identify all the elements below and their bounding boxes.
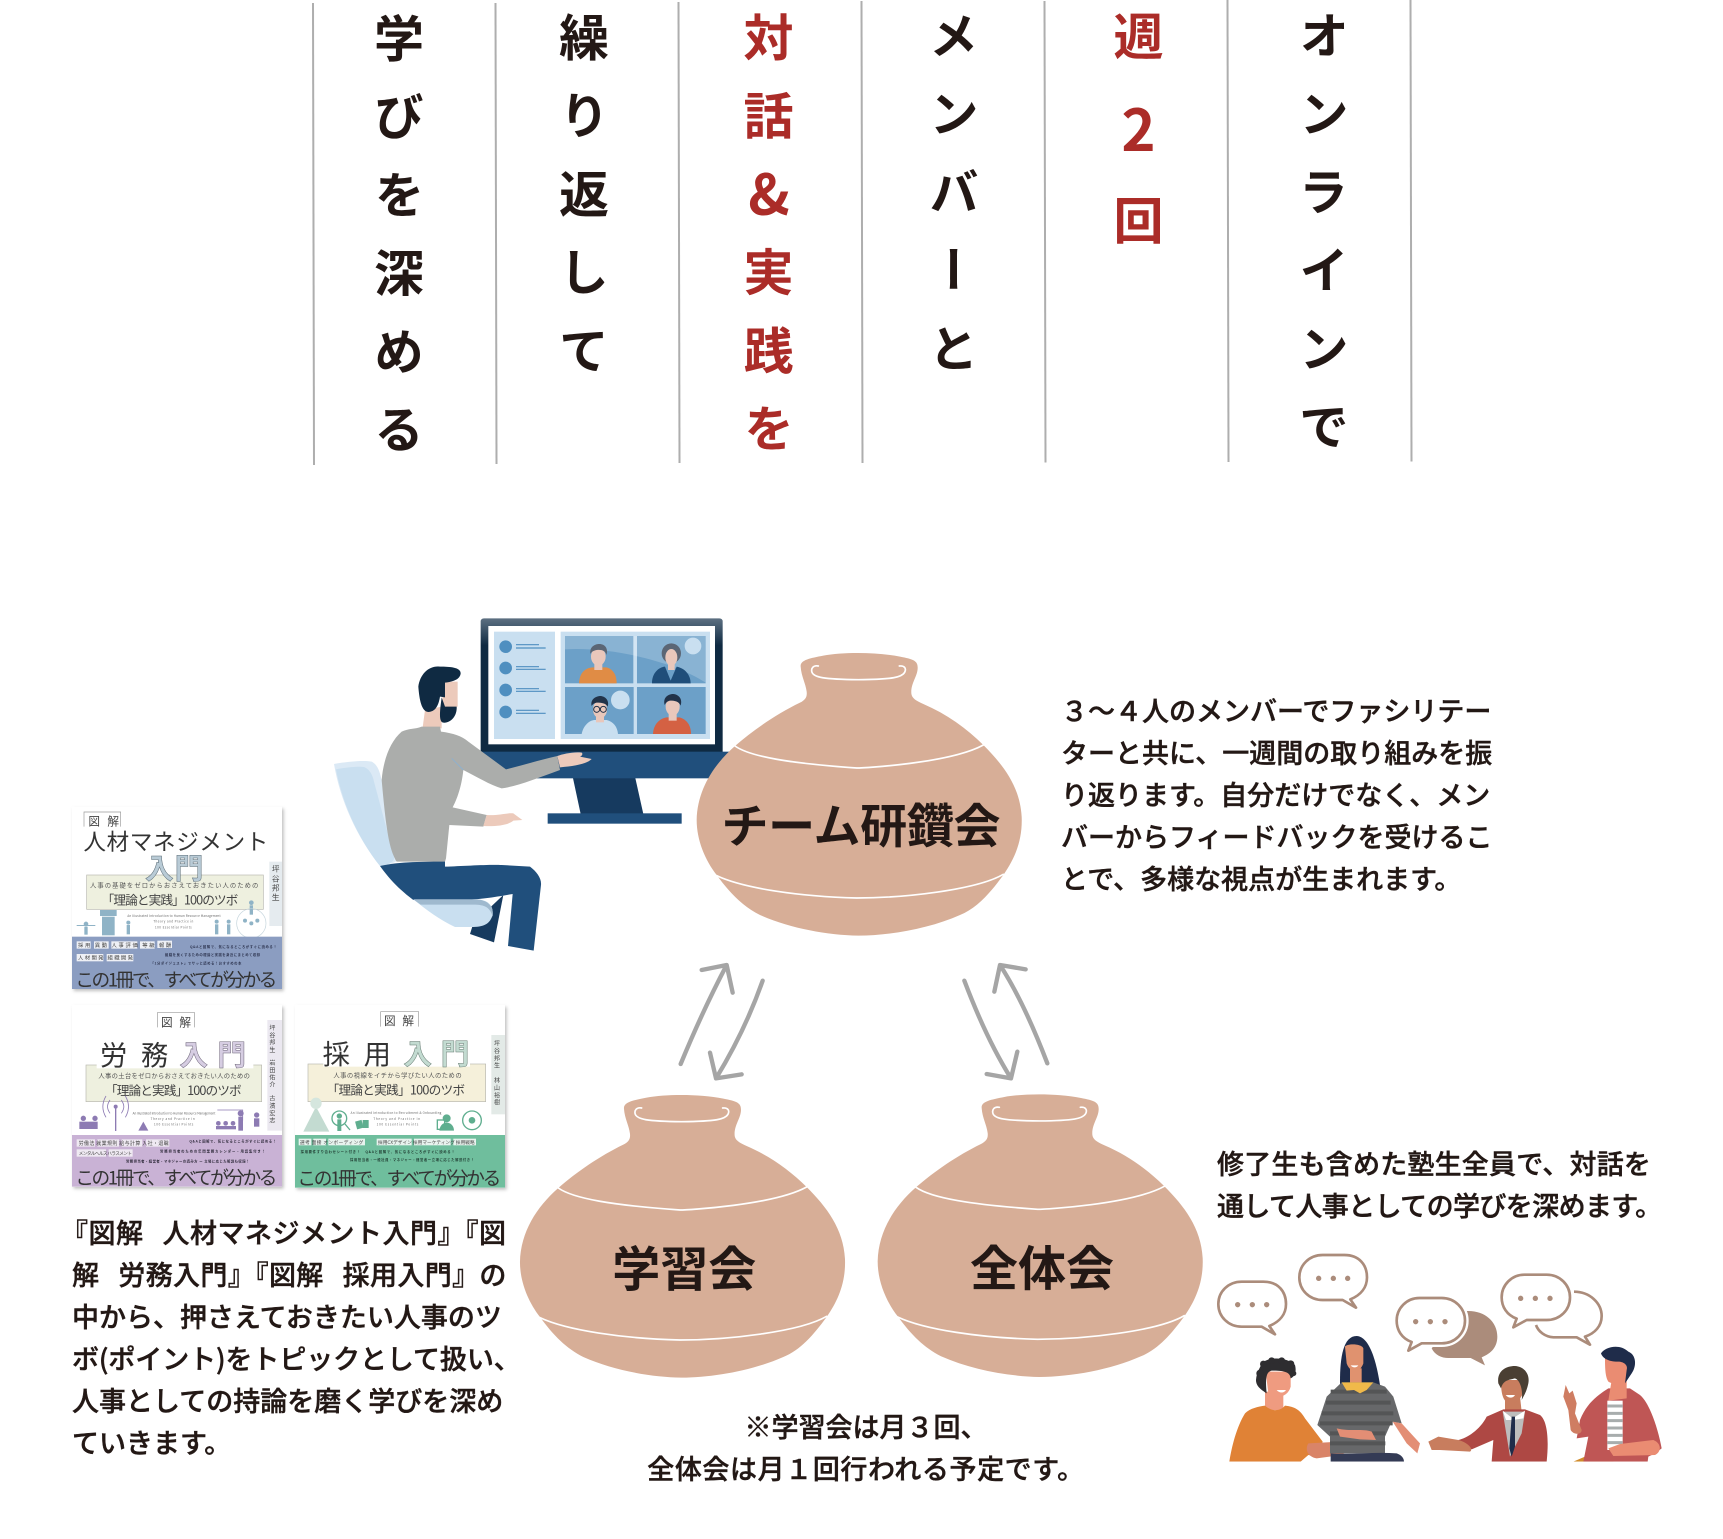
book: 図解 労務入門: 「理論と実践」100のツボ	[105, 1080, 242, 1099]
book: 図解 採用入門: 邦	[494, 1053, 500, 1062]
text block: チーム研鑽会 description: ３〜４人のメンバーでファシリテー	[1061, 690, 1491, 729]
cover pictograms	[79, 1105, 259, 1131]
book: 図解 労務入門: Theory and Practice in	[151, 1117, 195, 1121]
vertical divider lines	[313, 0, 1412, 465]
book: 図解 労務入門: 邦	[269, 1038, 275, 1047]
book: 図解 採用入門: 林	[494, 1076, 500, 1085]
speech bubble 1	[1218, 1282, 1286, 1334]
book: 図解 人材マネジメント入門: 「1分ダイジェスト」でサッと読める！おすすめの本	[151, 960, 242, 965]
arrow: left down	[710, 981, 763, 1078]
book: 図解 労務入門: Q&Aと図解で、気になるところがすぐに読める！	[189, 1139, 276, 1144]
text block: 全体会 description: 通して人事としての学びを深めます。	[1217, 1185, 1661, 1224]
book: 図解 人材マネジメント入門: 「理論と実践」100のツボ	[102, 889, 239, 908]
book: 図解 人材マネジメント入門: この1冊で、すべてが分かる	[75, 966, 277, 993]
book: 図解 人材マネジメント入門: 人事の基礎をゼロからおさえておきたい人のための	[90, 880, 258, 889]
arrow: right up	[994, 965, 1047, 1063]
person: man in suit	[1428, 1366, 1548, 1462]
book: 図解 労務入門: 労務	[100, 1033, 168, 1073]
vase: 学習会	[520, 1095, 845, 1378]
person: woman in striped sweater	[1317, 1336, 1420, 1462]
screen participant 3	[582, 691, 630, 734]
speech bubble 4 with outline bubble	[1502, 1275, 1602, 1345]
vase: チーム研鑽会	[697, 653, 1022, 936]
book: 図解 人材マネジメント入門: Q&Aと図解で、気になるところがすぐに読める！	[190, 944, 277, 949]
book: 図解 採用入門: 採用	[323, 1032, 391, 1072]
book: 図解 労務入門: 濱	[269, 1101, 275, 1110]
screen participant 1	[579, 644, 617, 683]
book: 図解 採用入門: Theory and Practice in	[373, 1117, 420, 1121]
book: 図解 採用入門: 採用要件すり合わせシート付き！	[301, 1149, 360, 1154]
text block: 学習会 description: 『図解 人材マネジメント入門』『図	[61, 1212, 506, 1251]
book: 図解 労務入門: 坪	[269, 1023, 275, 1032]
book: 図解 採用入門: 人事の視線をイチから学びたい人のための	[333, 1070, 462, 1079]
book: 図解 人材マネジメント入門: 100 Essential Points	[155, 925, 192, 929]
note: meeting frequency	[647, 1406, 1085, 1487]
person: orange sweater	[1229, 1357, 1352, 1462]
arrows between vases	[681, 965, 1047, 1078]
vase: 全体会: 全体会	[970, 1229, 1114, 1299]
text block: チーム研鑽会 description: ターと共に、一週間の取り組みを振	[1061, 732, 1492, 771]
book: 図解 採用入門: 100 Essential Points	[377, 1123, 419, 1127]
book: 図解 人材マネジメント入門: Theory and Practice in	[153, 920, 194, 924]
speech bubble 3 with filled bubble	[1397, 1298, 1497, 1365]
heading column: 週2回: 週 2 回	[1096, 10, 1180, 284]
text block: 全体会 description	[1217, 1143, 1661, 1224]
cover pictograms	[77, 900, 259, 935]
book: 図解 労務入門: 志	[269, 1116, 275, 1125]
text block: 学習会 description: ていきます。	[72, 1422, 231, 1461]
book: 図解 採用入門: 図解	[384, 1012, 414, 1029]
arrow: left up	[681, 965, 733, 1064]
book: 図解 採用入門: 生	[494, 1061, 500, 1070]
book: 図解 人材マネジメント入門: An Illustrated Introduction to Human Resource Management	[127, 914, 222, 918]
book: 図解 採用入門: 入門	[403, 1032, 469, 1073]
book: 図解 労務入門: 岩	[269, 1058, 275, 1067]
book: 図解 採用入門	[295, 1005, 505, 1191]
screen participant 2	[652, 638, 701, 683]
heading column: 繰り返して: 繰り返して	[548, 12, 620, 403]
illustration: man at monitor in video call	[334, 618, 734, 951]
book: 図解 採用入門: Q&Aと図解で、気になるところがすぐに読める！	[365, 1149, 455, 1154]
book: 図解 労務入門: 入門	[179, 1033, 246, 1074]
book: 図解 労務入門: 佑	[269, 1073, 275, 1082]
book: 図解 人材マネジメント入門: 坪	[272, 864, 280, 875]
book: 図解 労務入門: メンタルヘルス ハラスメント	[79, 1150, 132, 1157]
text block: 学習会 description	[61, 1212, 521, 1461]
book: 図解 人材マネジメント入門: 人材開発 組織開発	[78, 954, 134, 962]
book: 図解 労務入門: 労務担当者のための年間業務カレンダー・用語集付き！	[160, 1149, 265, 1154]
vase: 学習会: 学習会	[612, 1230, 756, 1300]
book: 図解 採用入門: 山	[494, 1083, 500, 1092]
text block: 学習会 description: ボ(ポイント)をトピックとして扱い、	[72, 1338, 521, 1377]
text block: チーム研鑽会 description	[1061, 690, 1492, 897]
book: 図解 人材マネジメント入門: 邦	[272, 883, 280, 894]
heading column: 対話&実践を: 対 話 & 実践を	[728, 12, 810, 481]
book: 図解 労務入門: 人事の土台をゼロからおさえておきたい人のための	[98, 1071, 250, 1080]
book: 図解 採用入門: 採用CXデザイン 採用マーケティング 採用戦略	[378, 1139, 475, 1146]
book: 図解 労務入門: 労働法 就業規則 給与計算 入社・退職	[79, 1140, 169, 1147]
book: 図解 採用入門: 裕	[494, 1090, 500, 1099]
note: meeting frequency: 全体会は月１回行われる予定です。	[647, 1448, 1085, 1487]
text block: チーム研鑽会 description: り返ります。自分だけでなく、メン	[1061, 774, 1490, 813]
book: 図解 人材マネジメント入門: 組織を良くするための理論と実践を身近にまとめて収録	[165, 952, 261, 957]
office chair	[334, 761, 400, 866]
vase: チーム研鑽会: チーム研鑽会	[722, 788, 1000, 857]
book: 図解 労務入門: 図解	[161, 1013, 191, 1030]
person: man in red open shirt	[1563, 1347, 1662, 1462]
book: 図解 労務入門: 生	[269, 1045, 275, 1054]
heading column: 学びを深める: 学びを深める	[363, 13, 435, 482]
monitor	[481, 618, 734, 824]
book: 図解 採用入門: 坪	[494, 1039, 500, 1048]
text block: 学習会 description: 人事としての持論を磨く学びを深め	[72, 1380, 503, 1419]
book: 図解 採用入門: 選考 面接 オンボーディング	[300, 1139, 364, 1146]
book: 図解 労務入門: 田	[269, 1065, 275, 1074]
book: 図解 人材マネジメント入門: 人材マネジメント	[83, 824, 268, 857]
text block: 学習会 description: 解 労務入門』『図解 採用入門』の	[72, 1254, 507, 1293]
text block: チーム研鑽会 description: バーからフィードバックを受けるこ	[1061, 816, 1492, 855]
cover pictograms	[303, 1107, 329, 1132]
arrow: right down	[964, 981, 1017, 1078]
speech bubble 2	[1299, 1255, 1367, 1308]
book: 図解 人材マネジメント入門: 入門	[145, 846, 203, 887]
book: 図解 労務入門: この1冊で、すべてが分かる	[75, 1163, 277, 1190]
book: 図解 労務入門: 谷	[269, 1030, 275, 1039]
book: 図解 採用入門: この1冊で、すべてが分かる	[297, 1164, 501, 1191]
heading column: オンラインで: オンラインで	[1288, 10, 1360, 479]
book: 図解 人材マネジメント入門: 採用 異動 人事評価 等級 報酬	[78, 941, 171, 949]
book: 図解 人材マネジメント入門: 生	[272, 892, 280, 903]
man figure	[380, 666, 592, 951]
book: 図解 採用入門: 採用担当者・一般社員・マネジャー・経営者ー立場に応じた解説付き！	[350, 1157, 474, 1162]
note: meeting frequency: ※学習会は月３回、	[744, 1406, 988, 1445]
book: 図解 労務入門: 労務担当者・経営者・マネジャーの読み方 ー 立場に応じた解説も収録！	[126, 1158, 249, 1163]
heading column: メンバーと: メンバーと	[918, 10, 990, 401]
text block: 学習会 description: 中から、押さえておきたい人事のツ	[72, 1296, 502, 1335]
book: 図解 採用入門: 樹	[494, 1098, 500, 1107]
screen participant 4	[653, 694, 691, 734]
book: 図解 採用入門: An Illustrated Introduction to Recruitment & Onboarding	[351, 1111, 442, 1115]
text block: 全体会 description: 修了生も含めた塾生全員で、対話を	[1217, 1143, 1651, 1182]
book: 図解 採用入門: 谷	[494, 1046, 500, 1055]
book: 図解 採用入門: 「理論と実践」100のツボ	[327, 1079, 465, 1098]
book: 図解 労務入門: 介	[269, 1080, 275, 1089]
book: 図解 人材マネジメント入門	[72, 807, 282, 993]
book: 図解 労務入門	[72, 1005, 282, 1190]
book: 図解 労務入門: 古	[269, 1094, 275, 1103]
book: 図解 労務入門: An Illustrated Introduction to Human Resource Management	[133, 1111, 216, 1115]
book: 図解 人材マネジメント入門: 谷	[272, 873, 280, 884]
vase: 全体会	[878, 1094, 1203, 1377]
illustration: discussion group with speech bubbles	[1218, 1255, 1662, 1462]
book: 図解 人材マネジメント入門: 図解	[88, 812, 119, 829]
text block: チーム研鑽会 description: とで、多様な視点が生まれます。	[1061, 858, 1461, 897]
book: 図解 労務入門: 宏	[269, 1108, 275, 1117]
book: 図解 労務入門: 100 Essential Points	[154, 1122, 194, 1126]
